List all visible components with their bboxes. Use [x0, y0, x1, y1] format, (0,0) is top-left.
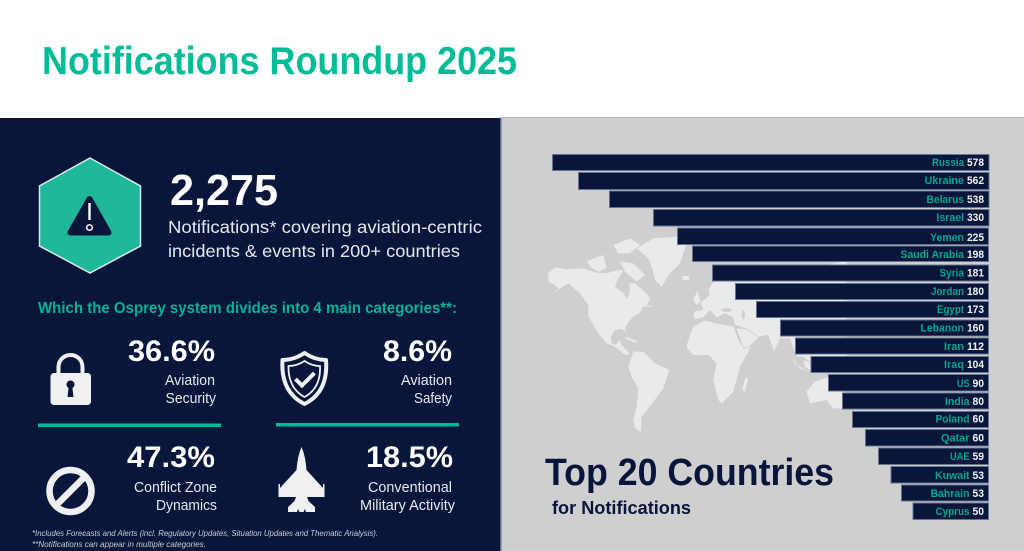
- bar: Ukraine: [578, 172, 989, 190]
- footnotes: *Includes Forecasts and Alerts (incl. Regulatory Updates, Situation Updates and Thematic Analysis).: [32, 528, 378, 538]
- category: aviation safety: Aviation: [401, 373, 452, 389]
- bar: Saudi Arabia: [692, 246, 988, 262]
- bar: Syria: [712, 265, 988, 281]
- bar: Iraq: Iraq: [944, 359, 964, 371]
- bar: Egypt: [756, 302, 988, 318]
- panel: top 20 countries: [500, 117, 1024, 551]
- bar: Saudi Arabia: 198: [967, 249, 984, 261]
- icon: fighter jet: [278, 447, 324, 512]
- category: aviation security: Aviation: [165, 373, 215, 389]
- bar: Jordan: [736, 284, 988, 300]
- chart subheading: for Notifications: [552, 498, 691, 518]
- bar: Israel: [654, 210, 989, 226]
- total notifications figure: 2,275: [170, 166, 278, 215]
- bar: Jordan: Jordan: [931, 286, 964, 298]
- bar: Russia: [552, 154, 989, 170]
- bar: Iraq: 104: [967, 359, 985, 371]
- category: aviation security: 36.6%: [128, 335, 215, 368]
- world map: [548, 237, 847, 432]
- bar: Poland: Poland: [936, 414, 970, 426]
- bar: Iran: 112: [967, 341, 984, 353]
- bar: Russia: Russia: [932, 157, 965, 169]
- category: conventional military activity: 18.5%: [366, 441, 453, 474]
- bar: Ukraine: Ukraine: [924, 175, 964, 187]
- bar: Belarus: [610, 191, 989, 208]
- bar: Belarus: 538: [967, 194, 984, 206]
- bar: Yemen: Yemen: [930, 232, 964, 244]
- bar: Kuwait: Kuwait: [935, 470, 970, 482]
- bar: Bahrain: [902, 485, 988, 501]
- bar: Cyprus: 50: [972, 506, 984, 518]
- bar: Cyprus: Cyprus: [936, 506, 970, 518]
- bar: Kuwait: [891, 466, 988, 483]
- bar: Syria: 181: [967, 268, 984, 280]
- bar: Poland: [852, 412, 988, 428]
- bar: Qatar: Qatar: [941, 432, 970, 444]
- category: conflict zone dynamics: [50, 441, 217, 514]
- bar: Yemen: 225: [967, 232, 984, 244]
- bar: Cyprus: [913, 503, 988, 520]
- category: aviation safety: Safety: [414, 391, 453, 407]
- bar: US: 90: [972, 378, 984, 390]
- bar: Israel: Israel: [936, 212, 964, 224]
- bar: Iraq: [811, 356, 988, 372]
- category: conflict zone dynamics: Conflict Zone: [134, 480, 217, 496]
- bar: US: US: [957, 378, 970, 390]
- category: conventional military activity: Conventional: [368, 480, 452, 496]
- bar: Yemen: [678, 228, 988, 244]
- bar: Egypt: Egypt: [937, 304, 964, 316]
- footnotes: **Notifications can appear in multiple categories.: [32, 539, 206, 549]
- icon: shield with check: [282, 353, 326, 404]
- bar: Qatar: 60: [972, 432, 984, 444]
- bar: Russia: 578: [967, 157, 984, 169]
- summary description: incidents & events in 200+ countries: [168, 241, 460, 261]
- title: Notifications Roundup 2025: [42, 40, 517, 83]
- bar: Syria: Syria: [940, 268, 965, 280]
- category: conventional military activity: [278, 441, 456, 514]
- category: conflict zone dynamics: 47.3%: [127, 441, 215, 474]
- category: aviation security: [50, 335, 217, 407]
- chart heading: Top 20 Countries: [545, 452, 834, 494]
- category: aviation safety: [282, 335, 453, 407]
- bar: Egypt: 173: [967, 304, 984, 316]
- footnotes: [32, 528, 378, 549]
- bar chart: notifications by country: [552, 154, 989, 520]
- icon: prohibition sign: [50, 470, 92, 512]
- bar: Lebanon: Lebanon: [920, 322, 964, 334]
- bar: India: 80: [972, 396, 984, 408]
- panel: summary: [0, 118, 500, 551]
- bar: India: India: [945, 396, 970, 408]
- bar: Iran: Iran: [944, 341, 964, 353]
- summary description: [168, 217, 482, 261]
- category: aviation security: Security: [166, 391, 217, 407]
- bar: Saudi Arabia: Saudi Arabia: [900, 249, 965, 261]
- icon: padlock: [50, 355, 91, 405]
- bar: Qatar: [866, 430, 988, 446]
- summary description: Notifications* covering aviation-centric: [168, 217, 482, 237]
- bar: Israel: 330: [967, 212, 984, 224]
- bar: Poland: 60: [972, 414, 984, 426]
- bar: UAE: 59: [972, 451, 984, 463]
- bar: Bahrain: Bahrain: [930, 488, 970, 500]
- categories heading: Which the Osprey system divides into 4 main categories**:: [38, 300, 457, 317]
- category: aviation safety: 8.6%: [383, 335, 452, 368]
- category: conflict zone dynamics: Dynamics: [156, 498, 217, 514]
- bar: Kuwait: 53: [972, 470, 984, 482]
- bar: India: [842, 393, 988, 409]
- bar: Jordan: 180: [967, 286, 984, 298]
- bar: UAE: [878, 448, 988, 464]
- bar: Lebanon: 160: [967, 322, 984, 334]
- category: conventional military activity: Military Activity: [360, 498, 456, 514]
- bar: Belarus: Belarus: [926, 194, 964, 206]
- icon: warning hexagon: [40, 158, 140, 273]
- bar: Iran: [796, 338, 988, 354]
- bar: Bahrain: 53: [972, 488, 984, 500]
- bar: US: [828, 374, 988, 391]
- bar: UAE: UAE: [950, 451, 970, 463]
- bar: Ukraine: 562: [967, 175, 984, 187]
- bar: Lebanon: [780, 320, 988, 336]
